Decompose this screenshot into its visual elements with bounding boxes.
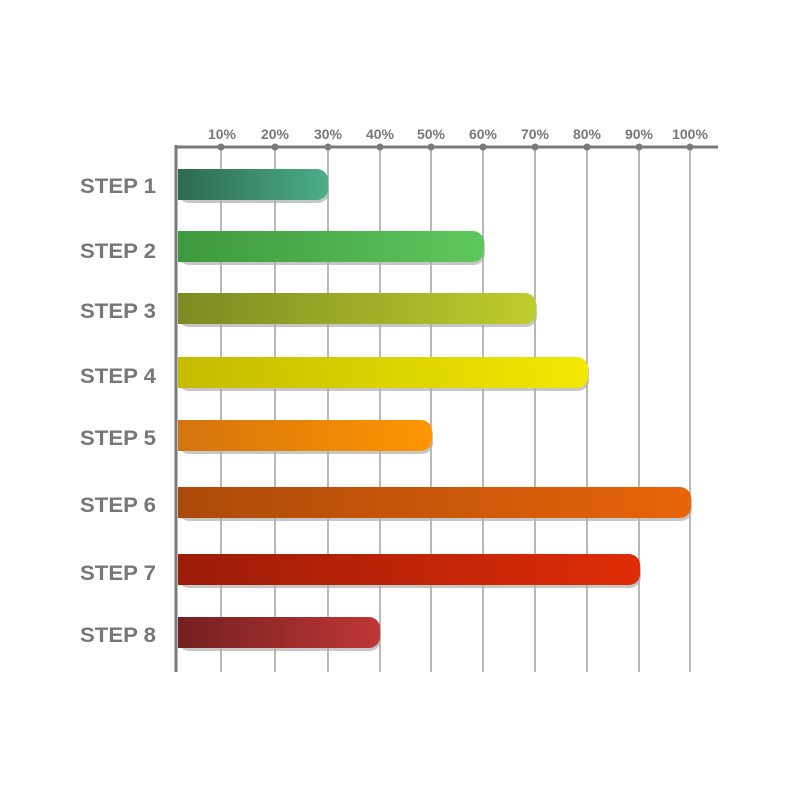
axis labels: 30%: [314, 126, 343, 142]
step labels: STEP 8: [80, 624, 156, 647]
step labels: STEP 1: [80, 175, 156, 198]
axis labels: 90%: [625, 126, 654, 142]
axis labels: 40%: [366, 126, 395, 142]
axis labels: 100%: [672, 126, 708, 142]
step labels: STEP 5: [80, 427, 156, 450]
grid lines: [221, 147, 690, 672]
axis labels: [208, 126, 708, 142]
bars: [178, 169, 692, 651]
step labels: [80, 175, 156, 647]
step labels: STEP 7: [80, 562, 156, 585]
axis labels: 20%: [261, 126, 290, 142]
step labels: STEP 2: [80, 240, 156, 263]
step labels: STEP 6: [80, 494, 156, 517]
axis labels: 50%: [417, 126, 446, 142]
step labels: STEP 3: [80, 300, 156, 323]
axis labels: 70%: [521, 126, 550, 142]
axis labels: 60%: [469, 126, 498, 142]
axis labels: 10%: [208, 126, 237, 142]
axis labels: 80%: [573, 126, 602, 142]
tick dots: [218, 144, 694, 150]
step labels: STEP 4: [80, 365, 156, 388]
axes: [176, 145, 718, 672]
